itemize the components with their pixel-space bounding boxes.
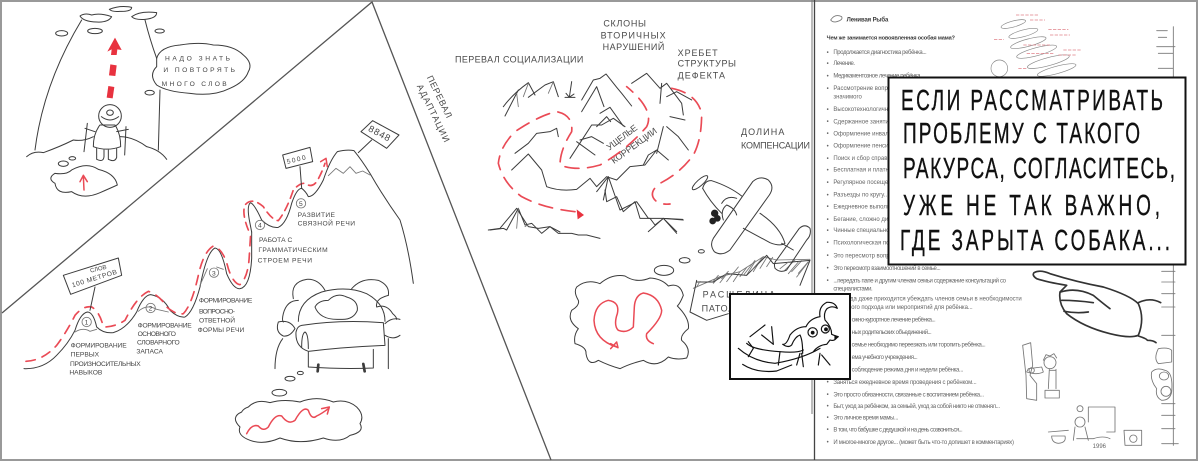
red correction route xyxy=(498,87,702,219)
cloud outline xyxy=(570,276,689,369)
quote text: ЕСЛИ РАССМАТРИВАТЬ xyxy=(901,85,1163,117)
document heading: Ленивая Рыба xyxy=(847,16,889,23)
document list lower: специалистами. xyxy=(833,287,873,293)
document list lower: ных родительских объединений... xyxy=(852,329,932,336)
document list lower: ...передать папе и другим членам семьи содержание консультаций со xyxy=(833,277,1007,284)
upper part of speech route with Everest xyxy=(244,121,413,283)
map labels: ХРЕБЕТ xyxy=(678,48,718,58)
document list lower: И многое-многое другое... (может быть что-то допишет в комментариях) xyxy=(833,440,1014,446)
document list upper xyxy=(827,50,927,234)
stage labels xyxy=(69,237,328,377)
map labels: КОМПЕНСАЦИИ xyxy=(741,140,810,150)
map labels: УЩЕЛЬЕ xyxy=(605,123,639,152)
document list lower: Заняться ежедневное время проведения с ребёнком... xyxy=(833,380,977,386)
map labels: ДЕФЕКТА xyxy=(678,70,725,80)
stage labels: ОСНОВНОГО xyxy=(138,331,176,338)
stage labels: ФОРМИРОВАНИЕ xyxy=(199,298,253,305)
document list lower: • xyxy=(827,253,829,259)
document list upper: • xyxy=(827,228,829,234)
speech cloud xyxy=(152,43,250,94)
panel: mountain route of speech development xyxy=(24,232,400,442)
red dashed route upper xyxy=(244,163,325,230)
map labels: АДАПТАЦИИ xyxy=(415,82,452,144)
map labels: ПЕРЕВАЛ СОЦИАЛИЗАЦИИ xyxy=(455,54,583,64)
red mini map sketch xyxy=(991,15,1082,79)
map labels: СТРУКТУРЫ xyxy=(678,59,736,69)
numbered stage markers: 3 xyxy=(212,270,216,277)
document list lower: Быт, уход за ребёнком, за семьёй, уход за собой никто не отменял... xyxy=(833,403,1000,410)
document list lower: • xyxy=(827,266,829,272)
label: speech development xyxy=(298,212,355,228)
ladder scale lower xyxy=(1162,265,1178,445)
map labels: КОРРЕКЦИИ xyxy=(609,126,659,166)
label: speech development: СВЯЗНОЙ РЕЧИ xyxy=(298,219,355,228)
document list upper: Высокотехнологичная xyxy=(833,107,895,113)
ravine hatching xyxy=(693,257,810,288)
document list upper: • xyxy=(827,50,829,56)
lower left range fragment xyxy=(490,190,683,238)
terrain line upper xyxy=(248,150,413,283)
sign: 100 metres xyxy=(63,258,122,310)
stage labels: СТРОЕМ РЕЧИ xyxy=(258,258,312,265)
document list upper: Ежедневное выполнение xyxy=(833,204,904,210)
document list upper: • xyxy=(827,86,829,92)
character in a backpack from behind xyxy=(275,279,400,371)
thought cloud with red squiggle and ravine sign xyxy=(570,250,810,369)
document list upper: Чинные специальной xyxy=(833,227,893,234)
snow line on peak xyxy=(328,167,370,176)
document list upper: • xyxy=(827,180,829,186)
document list lower: Это просто обязанности, связанные с воспитанием ребёнка... xyxy=(833,392,984,398)
document list lower: Это пересмотр вопроса xyxy=(833,253,900,259)
quote text: УЖЕ НЕ ТАК ВАЖНО, xyxy=(903,190,1160,222)
document list upper: • xyxy=(827,61,829,67)
document list lower: ема учебного учреждения... xyxy=(852,355,918,361)
thought ovals xyxy=(654,250,704,275)
document list upper: Рассмотрение вопроса xyxy=(833,86,898,92)
diagonal panel dividers xyxy=(2,2,551,460)
document heading xyxy=(827,16,956,41)
red dashed route xyxy=(26,234,251,361)
document list upper: • xyxy=(827,144,829,150)
sign: ravine of pathology xyxy=(690,255,810,320)
map labels: ВТОРИЧНЫХ xyxy=(601,31,666,41)
numbered stage markers xyxy=(82,268,219,327)
stage marker 4 xyxy=(255,220,265,230)
document list upper: Оформление инвалидности xyxy=(833,131,911,137)
stage marker 4: 4 xyxy=(258,223,262,230)
document list lower: соблюдение режима дня и недели ребёнка... xyxy=(852,367,964,373)
document list upper: • xyxy=(827,132,829,138)
quote text: ПРОБЛЕМУ С ТАКОГО xyxy=(903,118,1140,150)
icon: pointing hand xyxy=(1033,271,1161,343)
panel: document page with list xyxy=(827,15,1178,450)
document list lower xyxy=(827,241,1022,446)
small thought cloud with red arrow xyxy=(51,157,117,196)
document list upper: • xyxy=(827,193,829,199)
document list lower: Это пересмотр взаимоотношений в семье... xyxy=(833,265,941,272)
speech cloud: МНОГО СЛОВ xyxy=(162,81,227,88)
stage labels: СЛОВАРНОГО xyxy=(137,340,180,347)
document list lower: или иного подхода или мероприятий для ребёнка... xyxy=(833,304,973,311)
sign: 5000 xyxy=(283,147,313,188)
document list lower: • xyxy=(827,380,829,386)
document list upper: значимого xyxy=(833,95,863,101)
stage labels: НАВЫКОВ xyxy=(69,370,103,377)
airplane over the ravine xyxy=(691,174,810,288)
document list lower: а иногда даже приходится убеждать членов семьи в необходимости xyxy=(833,297,1022,303)
pilot dark ears xyxy=(709,210,721,224)
document list lower: семье необходимо переезжать или торопить ребёнка... xyxy=(852,343,986,349)
document list lower: Это личное время мамы... xyxy=(833,416,899,422)
callout: dog digging box xyxy=(730,294,850,379)
mountain outline xyxy=(35,7,164,150)
sign: 100 metres: СЛОВ xyxy=(90,265,107,275)
document list upper: • xyxy=(827,217,829,223)
stage labels: ФОРМЫ РЕЧИ xyxy=(198,327,245,334)
map labels: НАРУШЕНИЙ xyxy=(603,41,664,52)
red dashed arrow upward xyxy=(107,38,122,98)
boy at the mirror xyxy=(1023,343,1059,400)
document heading: Чем же занимается новоявленная особая мама? xyxy=(827,34,956,41)
divider of the right page xyxy=(811,0,813,414)
document list upper: Регулярное посещение xyxy=(833,180,899,186)
map labels: ПЕРЕВАЛ xyxy=(425,74,454,120)
label: speech development: РАЗВИТИЕ xyxy=(298,212,336,219)
stage labels: ПЕРВЫХ xyxy=(71,352,100,359)
ladder scale xyxy=(1157,27,1175,77)
document list upper: • xyxy=(827,156,829,162)
quote text xyxy=(900,85,1175,257)
climber on the ladder xyxy=(1151,348,1172,400)
stage labels: РАБОТА С xyxy=(259,237,293,244)
document list upper: Бегание, сложно диагнозы xyxy=(833,217,907,223)
sign: 8848: 8848 xyxy=(367,124,392,143)
icon: dog xyxy=(738,302,838,371)
document list upper: Оформление пенсий xyxy=(833,143,892,150)
document list lower: • xyxy=(827,392,829,398)
document list upper: Бесплатная и платная xyxy=(833,168,895,174)
stage marker 5: 5 xyxy=(299,201,303,208)
document list lower: • xyxy=(827,241,829,247)
document list lower: • xyxy=(827,404,829,410)
sign: ravine of pathology: ПАТОЛОГИИ xyxy=(702,303,762,313)
document list upper: Разъезды по кругу... xyxy=(833,193,889,199)
sign: 5000: 5000 xyxy=(286,154,307,166)
red squiggle xyxy=(594,293,662,349)
document list upper: Продолжается диагностика ребёнка... xyxy=(833,50,927,56)
stage labels: ОТВЕТНОЙ xyxy=(199,316,235,325)
speech cloud: И ПОВТОРЯТЬ xyxy=(163,67,236,74)
document list lower: • xyxy=(827,278,829,284)
airplane xyxy=(691,174,810,271)
sign: ravine of pathology: РАСЩЕЛИНА xyxy=(703,290,775,300)
document list lower: • xyxy=(827,428,829,434)
terrain line xyxy=(24,232,252,369)
document list upper: • xyxy=(827,107,829,113)
document list lower: В том, что бабушке с дедушкой и на день созвониться... xyxy=(833,427,963,434)
sign: 100 metres: 100 МЕТРОВ xyxy=(71,269,118,289)
document list upper: Лечение. xyxy=(833,61,855,67)
panel: climber at the foot of a word mountain xyxy=(27,7,413,283)
document list upper: • xyxy=(827,205,829,211)
mountain ranges xyxy=(488,73,692,232)
numbered stage markers: 2 xyxy=(149,306,153,313)
document list lower: • xyxy=(827,416,829,422)
sign: 8848 xyxy=(358,121,399,153)
stage labels: ВОПРОСНО- xyxy=(199,308,235,315)
quote text: РАКУРСА, СОГЛАСИТЕСЬ, xyxy=(903,153,1175,185)
document list upper: • xyxy=(827,74,829,80)
map labels: ДОЛИНА xyxy=(741,127,784,137)
document list upper: • xyxy=(827,120,829,126)
numbered stage markers: 1 xyxy=(85,320,89,327)
stage labels: ФОРМИРОВАНИЕ xyxy=(138,323,192,330)
speech cloud: НАДО ЗНАТЬ xyxy=(165,56,231,63)
climber figure xyxy=(27,105,167,161)
document list upper: Медикаментозное лечение ребёнка. xyxy=(833,74,922,80)
kitchen sketch xyxy=(1048,406,1142,450)
stage labels: ПРОИЗНОСИТЕЛЬНЫХ xyxy=(70,361,141,368)
quote text: ГДЕ ЗАРЫТА СОБАКА... xyxy=(900,225,1170,257)
document list upper: Сдержанное занятие xyxy=(833,119,893,125)
stage labels: ФОРМИРОВАНИЕ xyxy=(71,342,127,349)
document list lower: ожно-курортное лечение ребёнка... xyxy=(852,318,936,324)
map labels: СКЛОНЫ xyxy=(603,19,646,29)
map labels xyxy=(415,19,810,166)
kitchen sketch: 1996 xyxy=(1093,444,1107,450)
callout: big handwritten quote box xyxy=(888,78,1186,264)
document list lower: • xyxy=(827,440,829,446)
document list upper: • xyxy=(827,168,829,174)
stage marker 5 xyxy=(296,199,306,208)
thought cloud with rising red line xyxy=(235,371,362,442)
stage labels: ГРАММАТИЧЕСКИМ xyxy=(258,247,328,254)
panel: correction map of mountains xyxy=(415,19,810,232)
red arrow head xyxy=(321,158,327,167)
document list upper: Поиск и сбор справок xyxy=(833,156,894,162)
document list lower: Психологическая помощь xyxy=(833,241,905,247)
stage labels: ЗАПАСА xyxy=(136,349,164,356)
